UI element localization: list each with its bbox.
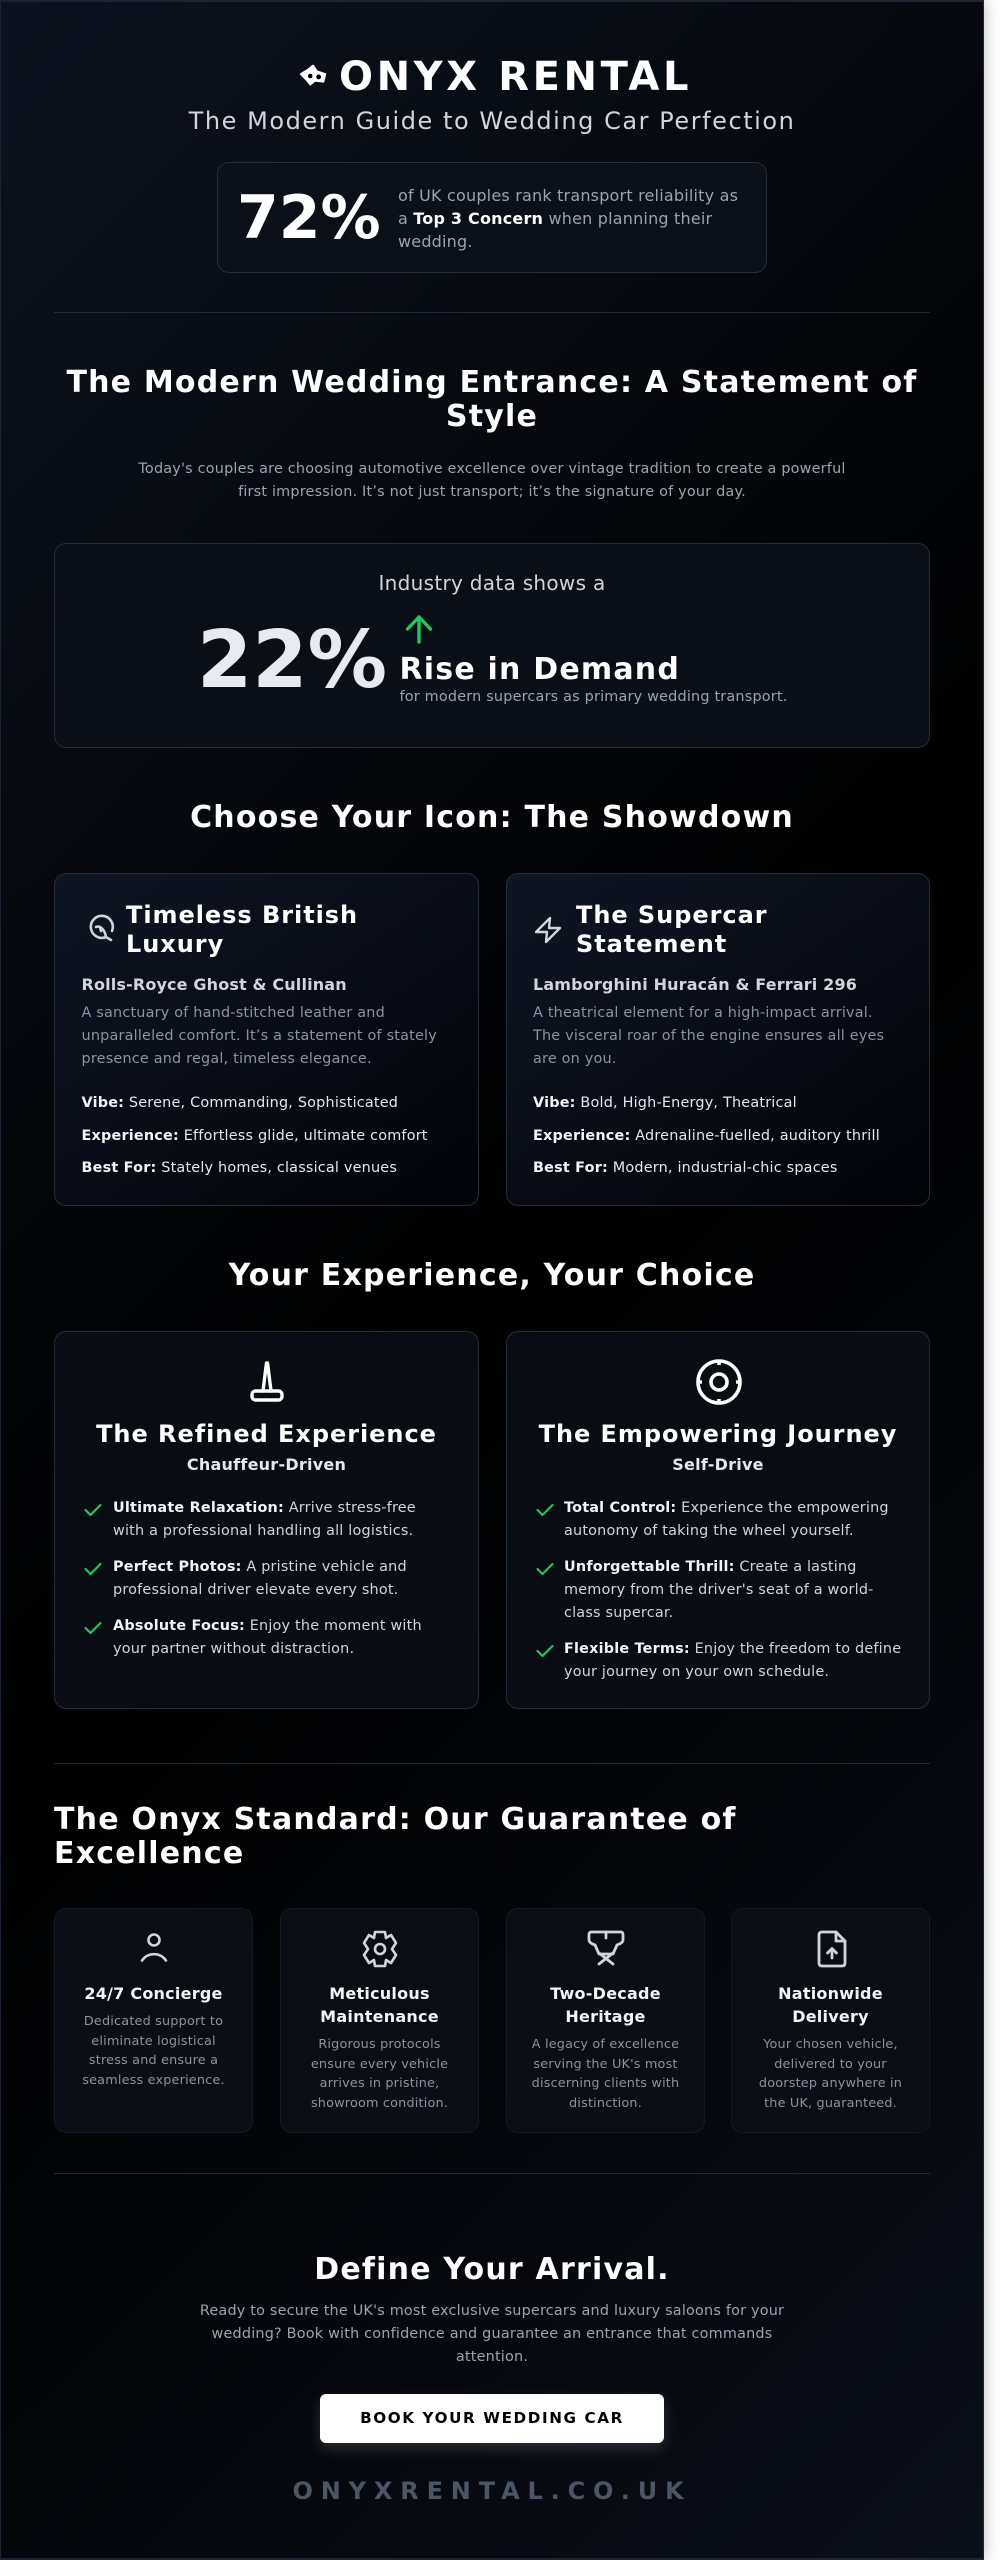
title [550, 1984, 661, 2026]
cta text: Ready to secure the UK's most exclusive supercars and luxury saloons for your [200, 2303, 784, 2319]
description [82, 1005, 437, 1067]
subtitle: The Modern Guide to Wedding Car Perfection [189, 107, 795, 135]
description: discerning clients with [532, 2076, 679, 2091]
description [532, 1005, 884, 1067]
panel: delivery [731, 1908, 930, 2133]
description: A theatrical element for a high-impact arrival. [533, 1005, 873, 1021]
icon: gear [362, 1930, 398, 1968]
car models: Lamborghini Huracán & Ferrari 296 [533, 975, 857, 994]
card title: The Empowering Journey [539, 1420, 897, 1448]
description: A sanctuary of hand-stitched leather and [82, 1005, 385, 1021]
benefit: focus [84, 1618, 422, 1657]
stat number: 72% [237, 183, 381, 253]
description: presence and regal, timeless elegance. [82, 1051, 372, 1067]
description: The visceral roar of the engine ensures all eyes [533, 1028, 884, 1044]
description [311, 2037, 448, 2111]
card title: Luxury [126, 930, 224, 958]
description: stress and ensure a [89, 2053, 218, 2068]
panel: refined experience [54, 1331, 479, 1709]
icon: leaf circle [90, 914, 114, 942]
panel: supercar statement [506, 873, 930, 1206]
benefit: control [536, 1500, 889, 1539]
panel: heritage [506, 1908, 705, 2133]
benefit: focus: your partner without distraction. [113, 1641, 354, 1657]
title: Maintenance [320, 2007, 439, 2026]
intro text: Today's couples are choosing automotive excellence over vintage tradition to create a powerful [138, 461, 846, 477]
icon: person [140, 1933, 168, 1962]
benefit: thrill: memory from the driver's seat of a world- [564, 1582, 874, 1598]
card subtitle: Chauffeur-Driven [187, 1455, 346, 1474]
intro text [138, 461, 846, 500]
heading: onyx standard [54, 1802, 737, 1871]
benefit: terms [536, 1641, 901, 1680]
title [778, 1984, 883, 2026]
icon: document upload [818, 1930, 846, 1968]
benefit list [536, 1500, 901, 1680]
title: ONYX RENTAL [339, 54, 692, 100]
card title [126, 901, 358, 958]
benefit: control: autonomy of taking the wheel yourself. [564, 1523, 854, 1539]
description: Your chosen vehicle, [763, 2037, 898, 2052]
car models: Rolls-Royce Ghost & Cullinan [82, 975, 347, 994]
benefit: terms: your journey on your own schedule. [564, 1664, 829, 1680]
description: unparalleled comfort. It’s a statement of stately [82, 1028, 437, 1044]
button: book your wedding car: BOOK YOUR WEDDING CAR [360, 2409, 624, 2427]
icon: lightning bolt [534, 916, 562, 944]
stat text: a Top 3 Concern when planning their [398, 209, 712, 228]
card title: The Supercar [576, 901, 768, 929]
icon: up arrow [406, 615, 432, 644]
description: delivered to your [774, 2057, 887, 2072]
benefit: thrill [536, 1559, 874, 1621]
benefit: thrill: class supercar. [564, 1605, 673, 1621]
attributes: Experience: Effortless glide, ultimate comfort [82, 1128, 428, 1144]
title: 24/7 Concierge [84, 1984, 223, 2003]
description: Dedicated support to [84, 2014, 223, 2029]
description: distinction. [569, 2096, 642, 2111]
description: seamless experience. [82, 2073, 225, 2088]
icon: trophy [588, 1930, 624, 1966]
description [759, 2037, 902, 2111]
description: Rigorous protocols [318, 2037, 441, 2052]
card title: The Refined Experience [96, 1420, 437, 1448]
heading: onyx standard: The Onyx Standard: Our Guarantee of [54, 1802, 737, 1837]
stat text: of UK couples rank transport reliability as [398, 186, 738, 205]
panel: maintenance [280, 1908, 479, 2133]
icon: steering wheel [696, 1359, 742, 1405]
icon: chauffeur cap [250, 1361, 284, 1402]
description: the UK, guaranteed. [764, 2096, 897, 2111]
description: eliminate logistical [91, 2034, 216, 2049]
benefit: relaxation: with a professional handling all logistics. [113, 1523, 413, 1539]
title: Meticulous [329, 1984, 430, 2003]
panel: 22% rise in demand [54, 543, 930, 748]
heading: modern wedding entrance: The Modern Wedding Entrance: A Statement of [66, 365, 918, 400]
description: showroom condition. [311, 2096, 448, 2111]
description: serving the UK's most [533, 2057, 678, 2072]
card subtitle: Self-Drive [672, 1455, 764, 1474]
benefit: photos: professional driver elevate every shot. [113, 1582, 398, 1598]
description [532, 2037, 679, 2111]
benefit: thrill: Unforgettable Thrill: Create a lasting [564, 1559, 857, 1575]
title: Heritage [565, 2007, 646, 2026]
heading: showdown: Choose Your Icon: The Showdown [190, 800, 794, 835]
rise note: for modern supercars as primary wedding transport. [400, 689, 788, 705]
attributes: Vibe: Bold, High-Energy, Theatrical [533, 1095, 797, 1111]
panel: empowering journey [506, 1331, 930, 1709]
benefit: photos: Perfect Photos: A pristine vehicle and [113, 1559, 407, 1575]
description: A legacy of excellence [532, 2037, 679, 2052]
description: are on you. [533, 1051, 617, 1067]
stat text [398, 186, 738, 251]
cta text [200, 2303, 784, 2365]
attributes [533, 1095, 880, 1176]
cta heading: Define Your Arrival. [314, 2252, 670, 2287]
label: Industry data shows a [378, 571, 606, 595]
benefit: relaxation: Ultimate Relaxation: Arrive stress-free [113, 1500, 416, 1516]
big number: 22% [197, 613, 387, 706]
intro text: first impression. It’s not just transport; it’s the signature of your day. [238, 484, 746, 500]
icon: gem logo [300, 64, 326, 86]
panel: timeless british luxury [54, 873, 479, 1206]
title: Delivery [792, 2007, 869, 2026]
description [82, 2014, 225, 2088]
benefit: control: Total Control: Experience the empowering [564, 1500, 889, 1516]
cta text: attention. [456, 2349, 528, 2365]
button: book your wedding car [320, 2394, 664, 2443]
title: Two-Decade [550, 1984, 661, 2003]
card title: Statement [576, 930, 727, 958]
panel: 72% stat [217, 162, 767, 273]
benefit: relaxation [84, 1500, 416, 1539]
panel: concierge [54, 1908, 253, 2133]
attributes [82, 1095, 428, 1176]
attributes: Best For: Stately homes, classical venues [82, 1160, 397, 1176]
title: Nationwide [778, 1984, 883, 2003]
heading: modern wedding entrance: Style [446, 399, 538, 434]
card title: Timeless British [126, 901, 358, 929]
heading: modern wedding entrance [66, 365, 918, 434]
title [320, 1984, 439, 2026]
attributes: Vibe: Serene, Commanding, Sophisticated [82, 1095, 398, 1111]
description: ensure every vehicle [311, 2057, 448, 2072]
heading: your experience: Your Experience, Your Choice [229, 1258, 755, 1293]
benefit list [84, 1500, 422, 1657]
header [188, 54, 795, 135]
benefit: photos [84, 1559, 407, 1598]
heading: onyx standard: Excellence [54, 1836, 244, 1871]
stat text: wedding. [398, 232, 473, 251]
benefit: focus: Absolute Focus: Enjoy the moment with [113, 1618, 422, 1634]
description: arrives in pristine, [320, 2076, 439, 2091]
attributes: Best For: Modern, industrial-chic spaces [533, 1160, 838, 1176]
cta text: wedding? Book with confidence and guarantee an entrance that commands [212, 2326, 772, 2342]
website url: ONYXRENTAL.CO.UK [293, 2477, 691, 2505]
benefit: terms: Flexible Terms: Enjoy the freedom to define [564, 1641, 901, 1657]
description: doorstep anywhere in [759, 2076, 902, 2091]
attributes: Experience: Adrenaline-fuelled, auditory thrill [533, 1128, 880, 1144]
card title [576, 901, 768, 958]
rise label: Rise in Demand [400, 652, 680, 687]
